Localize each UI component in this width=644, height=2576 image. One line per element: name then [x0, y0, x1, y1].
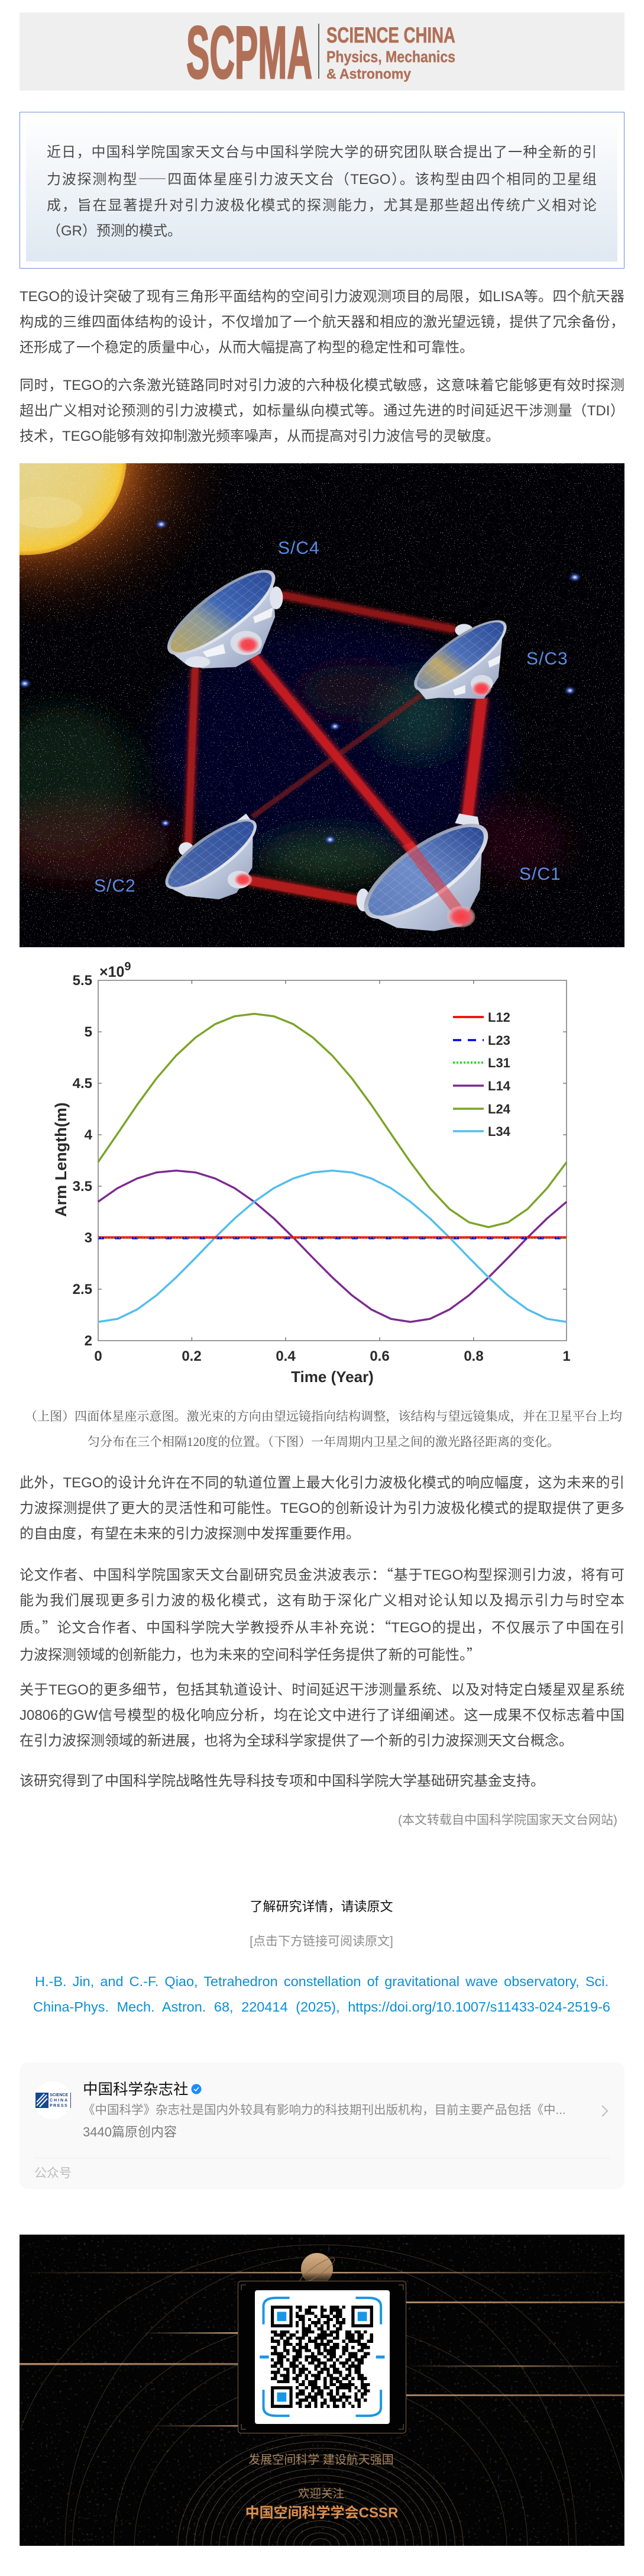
concentric orbit arcs [20, 2245, 624, 2546]
account description: 《中国科学》杂志社是国内外较具有影响力的科技期刊出版机构，目前主要产品包括《中... [83, 2103, 566, 2117]
footer slogan and society name: 中国空间科学学会CSSR [245, 2505, 398, 2521]
verified badge [192, 2084, 201, 2094]
gradient panel with intro text: 成，旨在显著提升对引力波极化模式的探测能力，尤其是那些超出传统广义相对论 [47, 198, 597, 214]
axis tick labels: 0.2 [182, 1348, 202, 1364]
axis tick labels: 0.6 [370, 1348, 390, 1364]
gradient panel with intro text: （GR）预测的模式。 [47, 223, 182, 239]
axis tick labels: 5 [85, 1024, 92, 1040]
QR frame [238, 2281, 406, 2433]
paragraph: further details [20, 1682, 624, 1749]
illustration: tetrahedron constellation in space [20, 463, 624, 947]
satellite S/C1 [356, 814, 488, 931]
sun [20, 463, 216, 616]
line chart: arm length over one year [52, 960, 571, 1386]
paragraph: TEGO design: TEGO的设计突破了现有三角形平面结构的空间引力波观测项目的局限，如LISA等。四个航天器 [20, 289, 624, 305]
paragraph: flexibility: 的自由度，有望在未来的引力波探测中发挥重要作用。 [20, 1526, 360, 1542]
axis tick labels: 3.5 [73, 1179, 92, 1195]
read original prompt: 了解研究详情，请读原文 [250, 1899, 393, 1914]
labels: spacecraft names: S/C3 [526, 649, 568, 669]
figure caption [25, 1409, 622, 1449]
account name: 中国科学杂志社 [83, 2081, 189, 2098]
header banner: SCPMA logo: Physics, Mechanics [326, 48, 455, 66]
bright blue stars [18, 519, 581, 845]
QR corner brackets [260, 2298, 384, 2416]
source note: (本文转载自中国科学院国家天文台网站) [398, 1813, 617, 1827]
paragraph: author quotes: 力波探测领域的创新能力，也为未来的空间科学任务提供了新的可能性。” [20, 1643, 481, 1664]
exponent label: ×10 [99, 964, 124, 980]
paragraph: author quotes: 论文作者、中国科学院国家天文台副研究员金洪波表示：“基于TEGO构型探测引力波，将有可 [20, 1563, 624, 1584]
legend [453, 1010, 511, 1139]
gradient panel with intro text: 力波探测构型——四面体星座引力波天文台（TEGO）。该构型由四个相同的卫星组 [47, 167, 597, 188]
avatar logo: PRESS [50, 2104, 68, 2108]
paragraph: six laser links: 技术，TEGO能够有效抑制激光频率噪声，从而提高对引力波信号的灵敏度。 [20, 428, 500, 444]
axis tick labels [73, 973, 571, 1364]
axis tick labels: 0 [94, 1348, 102, 1364]
intro callout box [20, 112, 624, 269]
axis tick labels: 2 [85, 1333, 92, 1349]
axis tick labels: 5.5 [73, 973, 92, 989]
header banner: SCPMA logo: SCIENCE CHINA [326, 23, 455, 47]
footer panel: dark space with QR code [20, 2235, 624, 2546]
article count: 3440篇原创内容 [83, 2125, 177, 2139]
paragraph: six laser links [20, 377, 624, 444]
axis tick labels: 4.5 [73, 1076, 92, 1092]
labels: spacecraft names: S/C4 [278, 538, 320, 558]
x axis title: Time (Year) [291, 1368, 374, 1386]
figure caption: （上图）四面体星座示意图。激光束的方向由望远镜指向结构调整，该结构与望远镜集成，并在卫星平台上均 [25, 1409, 622, 1423]
paragraph: TEGO design: 还形成了一个稳定的质量中心，从而大幅提高了构型的稳定性和可靠性。 [20, 340, 474, 356]
labels: spacecraft names: S/C1 [519, 864, 561, 884]
legend: L34 [488, 1124, 511, 1139]
plot frame and ticks [98, 980, 567, 1341]
axis tick labels: 1 [562, 1348, 571, 1364]
paragraph: further details: J0806的GW信号模型的极化响应分析，均在论文中进行了详细阐述。这一成果不仅标志着中国 [20, 1707, 624, 1723]
paragraph: flexibility: 力波探测提供了更大的灵活性和可能性。TEGO的创新设计为引力波极化模式的提取提供了更多 [20, 1500, 624, 1516]
paragraph: further details: 在引力波探测领域的新进展，也将为全球科学家提供了一个新的引力波探测天文台概念。 [20, 1733, 573, 1749]
avatar logo [35, 2093, 71, 2108]
citation [33, 1974, 610, 2015]
header banner: SCPMA logo: & Astronomy [326, 66, 412, 82]
legend: L12 [488, 1010, 510, 1025]
paragraph: six laser links: 同时，TEGO的六条激光链路同时对引力波的六种极化模式敏感，这意味着它能够更有效时探测 [20, 377, 624, 393]
satellite S/C2 [165, 814, 257, 899]
legend: L14 [488, 1079, 511, 1093]
axis tick labels: 0.8 [464, 1348, 484, 1364]
account card [20, 2062, 624, 2189]
laser beams between spacecraft [188, 595, 482, 912]
gradient panel with intro text: 近日，中国科学院国家天文台与中国科学院大学的研究团队联合提出了一种全新的引 [47, 144, 597, 160]
citation: China-Phys. Mech. Astron. 68, 220414 (2025), https://doi.org/10.1007/s11433-024-2519-6 [33, 1999, 610, 2014]
gradient panel with intro text [26, 112, 617, 262]
data curves [98, 1014, 567, 1322]
footer slogan and society name: 欢迎关注 [298, 2487, 344, 2500]
paragraph: author quotes: 质。”论文合作者、中国科学院大学教授乔从丰补充说：“TEGO的提出，不仅展示了中国在引 [20, 1616, 624, 1636]
link hint: [点击下方链接可阅读原文] [250, 1935, 393, 1948]
paragraph: author quotes: 能为我们展现更多引力波的极化模式，这有助于深化广义相对论认知以及揭示引力与时空本 [20, 1593, 624, 1609]
footer slogan and society name: 发展空间科学 建设航天强国 [248, 2453, 394, 2467]
footer slogan and society name [245, 2453, 398, 2521]
figure caption: 匀分布在三个相隔120度的位置。（下图）一年周期内卫星之间的激光路径距离的变化。 [88, 1435, 559, 1449]
labels: spacecraft names [94, 538, 568, 896]
axis tick labels: 2.5 [73, 1281, 92, 1297]
paragraph: flexibility: 此外，TEGO的设计允许在不同的轨道位置上最大化引力波极化模式的响应幅度，这为未来的引 [20, 1475, 624, 1491]
account type: 公众号 [34, 2167, 72, 2180]
satellite S/C4 [167, 570, 283, 669]
gold horizontal streaks [20, 2272, 624, 2427]
header banner: SCPMA logo [20, 12, 624, 91]
paragraph: further details: 关于TEGO的更多细节，包括其轨道设计、时间延迟干涉测量系统、以及对特定白矮星双星系统 [20, 1682, 624, 1698]
planet with ring [299, 2253, 335, 2281]
y axis title: Arm Length(m) [52, 1102, 70, 1217]
axis tick labels: 4 [85, 1127, 93, 1143]
citation: H.-B. Jin, and C.-F. Qiao, Tetrahedron constellation of gravitational wave observatory, Sci. [35, 1974, 609, 1989]
avatar logo: SCIENCE [50, 2093, 68, 2097]
star field [20, 463, 624, 947]
paragraph: author quotes [20, 1563, 624, 1664]
axis tick labels: 3 [85, 1230, 92, 1246]
legend: L23 [488, 1033, 510, 1048]
legend: L31 [488, 1055, 510, 1070]
paragraph: flexibility [20, 1475, 624, 1542]
chevron [602, 2105, 608, 2117]
paragraph: TEGO design [20, 289, 624, 356]
avatar logo: CHINA [50, 2099, 69, 2103]
paragraph: funding: 该研究得到了中国科学院战略性先导科技专项和中国科学院大学基础研究基金支持。 [20, 1773, 545, 1789]
labels: spacecraft names: S/C2 [94, 876, 136, 896]
paragraph: six laser links: 超出广义相对论预测的引力波模式，如标量纵向模式等。通过先进的时间延迟干涉测量（TDI） [20, 403, 624, 419]
axis tick labels: 0.4 [276, 1348, 296, 1364]
exponent label: 9 [124, 960, 131, 973]
legend: L24 [488, 1102, 511, 1116]
satellite S/C3 [414, 620, 507, 699]
QR code modules [271, 2307, 373, 2406]
paragraph: TEGO design: 构成的三维四面体结构的设计，不仅增加了一个航天器和相应的激光望远镜，提供了冗余备份， [20, 314, 624, 330]
